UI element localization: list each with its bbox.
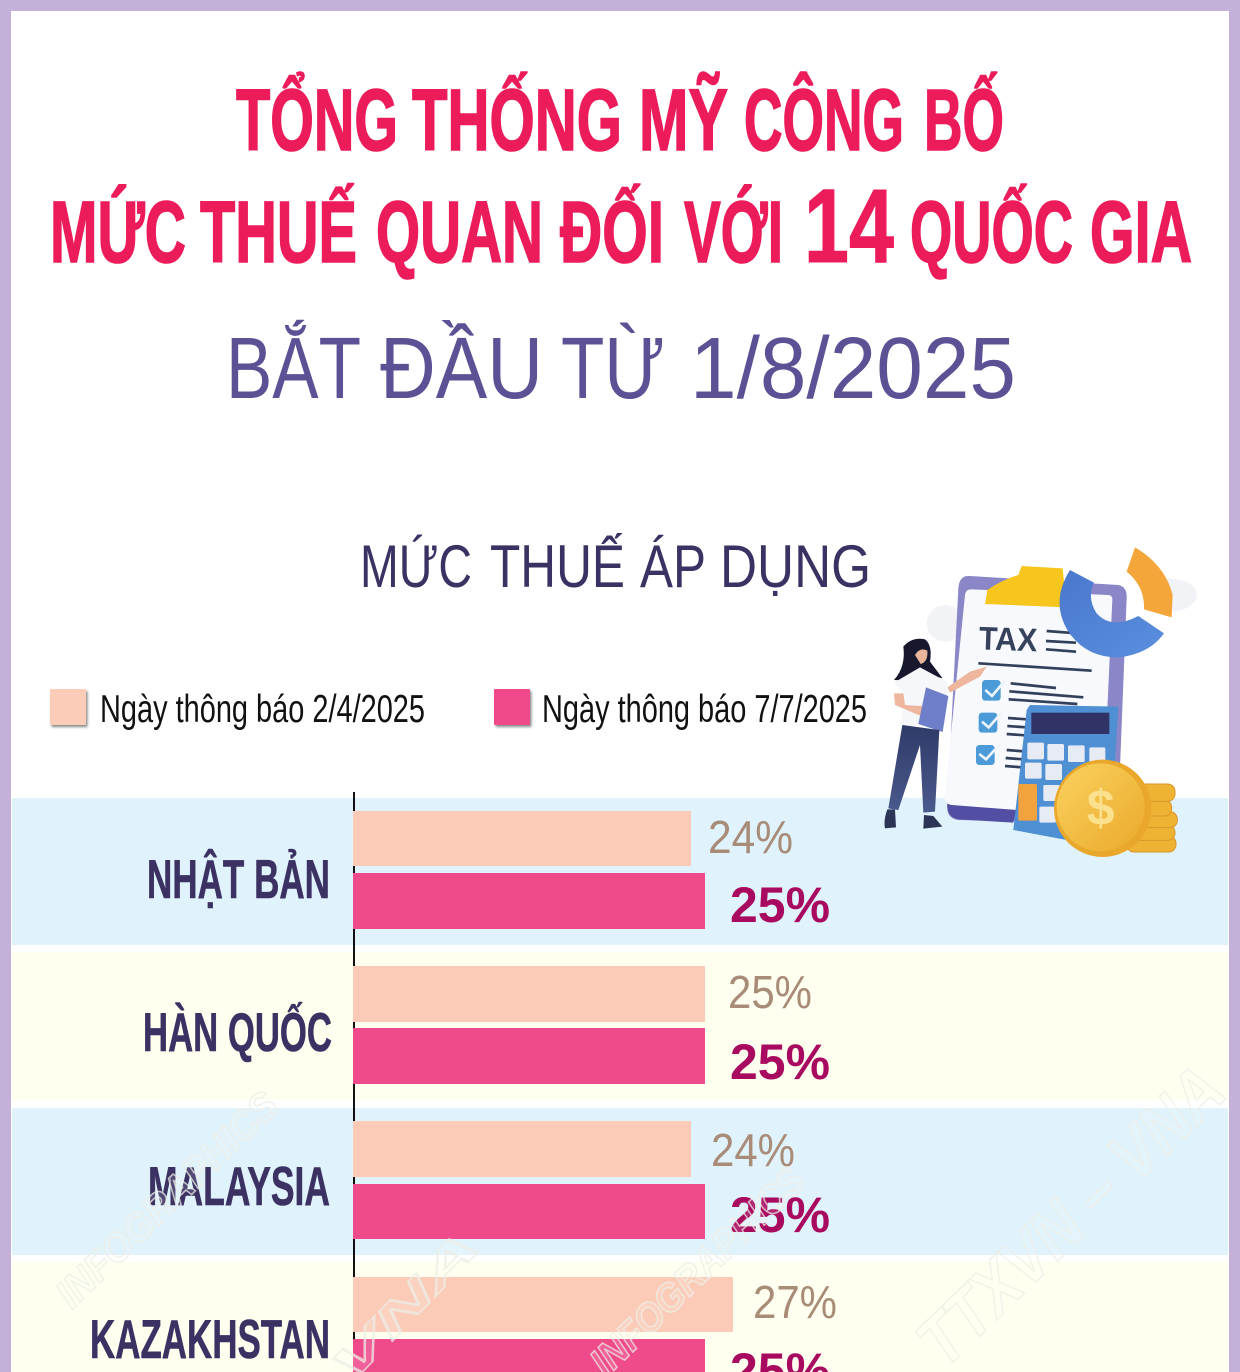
section heading: ÁP: [640, 533, 706, 600]
legend item: 7/7/2025: Ngày thông báo 7/7/2025: [542, 688, 867, 731]
calculator: [1013, 705, 1118, 840]
title: MỸ: [639, 72, 728, 169]
legend item: 7/7/2025: [494, 688, 867, 731]
subtitle: start date: ĐẦU: [380, 319, 543, 417]
coins: [1054, 760, 1177, 857]
title: THỐNG: [412, 72, 622, 169]
row: Hàn Quốc: HÀN QUỐC: [143, 1001, 332, 1063]
row: Malaysia: 24%: [711, 1124, 795, 1176]
chart ring and wedge: [1060, 547, 1173, 657]
legend item: 2/4/2025: Ngày thông báo 2/4/2025: [100, 688, 425, 731]
watermarks: [48, 1050, 1240, 1372]
row: Malaysia: MALAYSIA: [148, 1155, 330, 1217]
title: MỨC: [50, 184, 186, 281]
label: TAX: TAX: [978, 619, 1038, 658]
title: THUẾ: [200, 184, 357, 281]
row: Nhật Bản: [147, 811, 830, 933]
clipboard: [945, 566, 1127, 823]
subtitle: start date: BẮT: [226, 319, 361, 417]
legend item: 2/4/2025: [50, 688, 425, 731]
title: QUỐC: [910, 184, 1073, 281]
section heading: DỤNG: [720, 533, 871, 600]
watermarks: INFOGRAPHICS: [48, 1083, 287, 1316]
row: Malaysia: [148, 1121, 830, 1243]
section heading: THUẾ: [490, 533, 625, 600]
subtitle: start date: [226, 319, 1016, 417]
clouds: [927, 578, 1197, 642]
title: ĐỐI: [560, 184, 664, 281]
checkboxes: [976, 680, 1001, 765]
section heading: MỨC: [360, 533, 472, 600]
row: Hàn Quốc: 25%: [730, 1034, 830, 1090]
title: BỐ: [924, 72, 1004, 169]
row backgrounds: [12, 798, 1228, 1372]
row: Nhật Bản: 24%: [708, 811, 793, 863]
coins: $: [1087, 780, 1115, 836]
title: CÔNG: [744, 72, 904, 169]
title: [50, 72, 1192, 285]
title: 14: [804, 168, 894, 285]
row: Kazakhstan: KAZAKHSTAN: [90, 1308, 330, 1370]
row: Nhật Bản: NHẬT BẢN: [147, 848, 330, 910]
row: Hàn Quốc: [143, 966, 830, 1090]
woman: [885, 639, 987, 829]
row: Malaysia: 25%: [730, 1187, 830, 1243]
row: Kazakhstan: [90, 1276, 837, 1372]
row: Kazakhstan: 27%: [753, 1276, 837, 1328]
subtitle: start date: TỪ: [561, 320, 665, 417]
legend: [50, 688, 867, 731]
title: VỚI: [684, 184, 783, 281]
title: QUAN: [376, 184, 543, 281]
subtitle: start date: 1/8/2025: [690, 320, 1016, 417]
title: TỔNG: [236, 72, 398, 169]
illustration: tax clipboard, woman, calculator, coins: [885, 547, 1197, 857]
section heading: [360, 533, 871, 600]
row: Nhật Bản: 25%: [730, 877, 830, 933]
row: Hàn Quốc: 25%: [728, 966, 812, 1018]
chart axis: [353, 792, 355, 1372]
